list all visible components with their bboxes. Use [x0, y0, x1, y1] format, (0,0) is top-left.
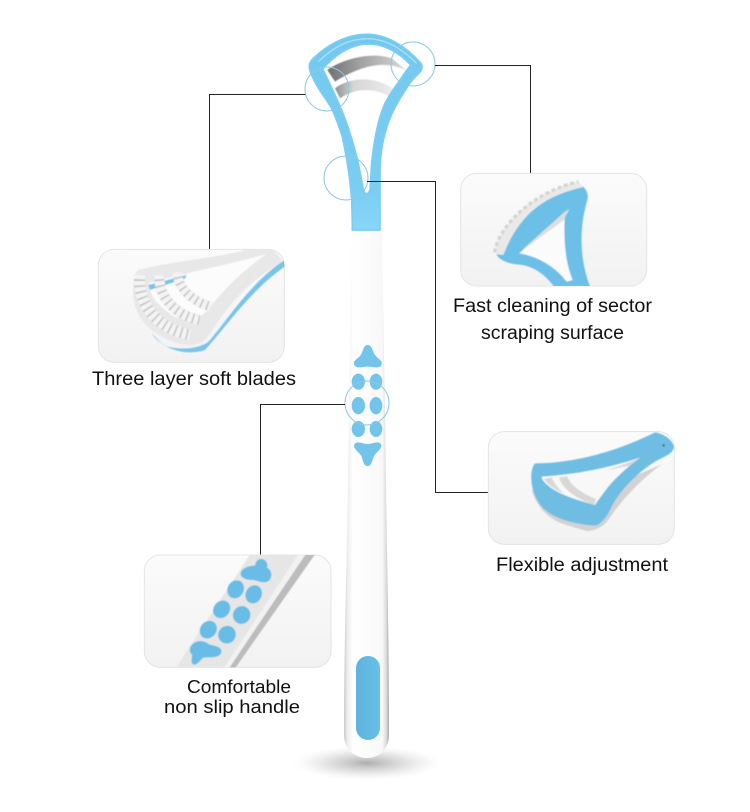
label: fast cleaning of sector scraping surface: Fast cleaning of sector — [453, 296, 653, 317]
bottom grip — [354, 442, 381, 466]
scraper head blades — [327, 56, 407, 98]
floor shadow under scraper — [293, 746, 441, 780]
end pill — [356, 656, 380, 740]
grip dots — [352, 345, 382, 466]
label: comfortable non slip handle: non slip handle — [164, 697, 300, 717]
panel: fast cleaning scraping surface — [461, 173, 647, 287]
callout circles — [305, 42, 435, 425]
tongue scraper product — [309, 34, 422, 758]
label: flexible adjustment: Flexible adjustment — [496, 555, 669, 576]
panel: comfortable non slip handle — [144, 554, 331, 668]
panel: flexible adjustment — [488, 432, 674, 544]
scraper head frame — [309, 34, 422, 230]
label: fast cleaning of sector scraping surface: scraping surface — [481, 323, 624, 344]
label: comfortable non slip handle: Comfortable — [187, 677, 291, 697]
label: three layer soft blades: Three layer soft blades — [92, 369, 296, 390]
label: fast cleaning of sector scraping surface — [453, 296, 653, 344]
connector lines — [210, 66, 530, 556]
label: comfortable non slip handle — [164, 677, 300, 717]
panel: three layer soft blades — [98, 249, 287, 362]
top grip — [354, 345, 382, 367]
infographic canvas — [92, 34, 675, 776]
handle — [344, 228, 389, 758]
head highlight — [318, 39, 417, 63]
